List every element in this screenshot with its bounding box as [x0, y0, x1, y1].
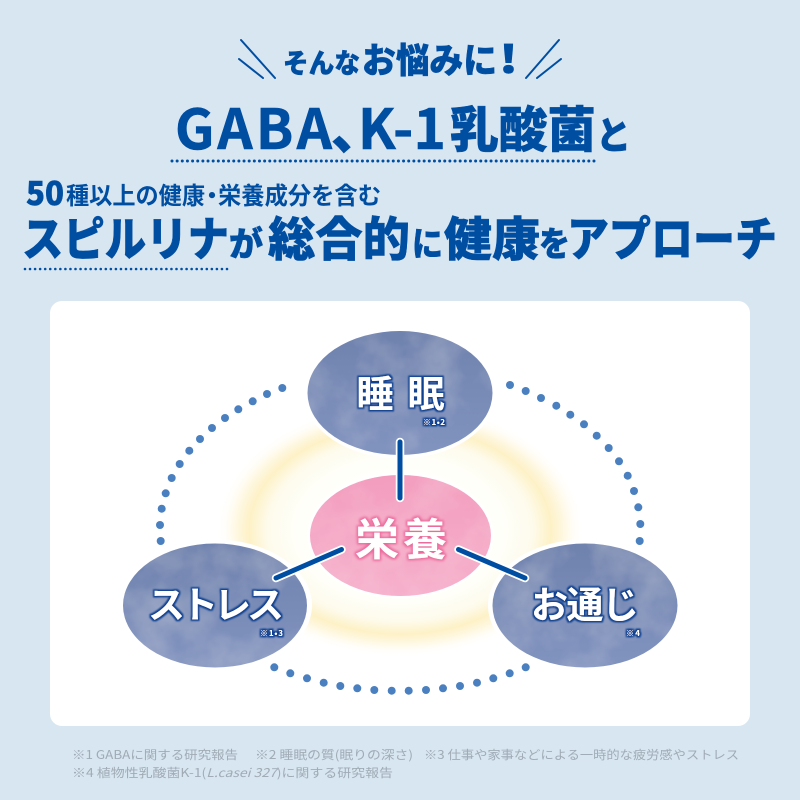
- footnotes: [72, 746, 739, 781]
- bubble: ストレス (left): [118, 540, 312, 672]
- heading: そんなお悩みに!: [283, 29, 518, 84]
- footnotes: ※3 仕事や家事などによる一時的な疲労感やストレス: [424, 746, 739, 763]
- heading: GABA、K-1乳酸菌と: [175, 85, 631, 165]
- heading: スピルリナが総合的に健康をアプローチ: 総合的: [268, 201, 410, 270]
- footnotes: ※2 睡眠の質(眠りの深さ): [255, 746, 413, 763]
- connector: top to center: [396, 442, 404, 498]
- subheading: 50種以上の健康・栄養成分を含む: [26, 169, 381, 215]
- subheading: 50種以上の健康・栄養成分を含む: 種以上の健康: [66, 176, 205, 211]
- heading: スピルリナが総合的に健康をアプローチ: [22, 201, 777, 270]
- heading: スピルリナが総合的に健康をアプローチ: を: [539, 217, 570, 266]
- heading: そんなお悩みに!: !: [499, 29, 518, 84]
- heading: スピルリナが総合的に健康をアプローチ: 健康: [444, 201, 540, 270]
- dotted ring: right arc: [506, 381, 644, 545]
- bubble: お通じ (right): お通じ: [531, 575, 639, 629]
- footnotes: ※1 GABAに関する研究報告: [72, 746, 238, 763]
- heading: GABA、K-1乳酸菌と: GABA: [175, 85, 333, 165]
- icon: right emphasis lines: [526, 40, 561, 78]
- heading: GABA、K-1乳酸菌と: 、: [331, 89, 383, 164]
- bubble: 睡眠 (top): 睡眠: [356, 364, 444, 418]
- connector: left to center: [276, 550, 342, 578]
- connector: right to center: [458, 550, 525, 578]
- bubble: 栄養 (center): [308, 472, 494, 598]
- subheading: 50種以上の健康・栄養成分を含む: 栄養成分を含む: [218, 176, 381, 211]
- subheading: 50種以上の健康・栄養成分を含む: 50: [26, 169, 64, 215]
- heading: スピルリナが総合的に健康をアプローチ: アプローチ: [567, 201, 777, 270]
- bubble: お通じ (right): ※4: [626, 628, 640, 639]
- yellow glow: [216, 403, 584, 657]
- dotted ring: left arc: [156, 384, 286, 545]
- heading: スピルリナが総合的に健康をアプローチ: スピルリナ: [22, 201, 229, 270]
- heading: スピルリナが総合的に健康をアプローチ: が: [229, 217, 263, 266]
- bubble: 睡眠 (top): [304, 328, 496, 458]
- bubble: お通じ (right): [488, 540, 682, 672]
- heading: GABA、K-1乳酸菌と: 乳酸菌: [450, 91, 596, 162]
- heading: GABA、K-1乳酸菌と: と: [596, 105, 631, 160]
- heading: スピルリナが総合的に健康をアプローチ: に: [412, 217, 443, 266]
- dotted ring: bottom arc: [270, 663, 530, 695]
- subheading: 50種以上の健康・栄養成分を含む: ・: [200, 176, 224, 211]
- heading: そんなお悩みに!: お悩みに: [362, 33, 497, 84]
- heading: そんなお悩みに!: そんな: [283, 42, 360, 81]
- dotted underline: GABA: [172, 160, 594, 162]
- bubble: ストレス (left): ※1•3: [260, 628, 283, 639]
- icon: left emphasis lines: [239, 40, 275, 78]
- heading: GABA、K-1乳酸菌と: K-1: [358, 85, 446, 165]
- dotted underline: スピルリナ: [25, 268, 228, 270]
- bubble: 栄養 (center): 栄養: [355, 504, 447, 568]
- footnotes: ※4 植物性乳酸菌K-1( L.casei 327 )に関する研究報告: [72, 764, 393, 781]
- bubble: 睡眠 (top): ※1•2: [423, 417, 445, 428]
- panel: diagram card: [50, 301, 750, 726]
- bubble: ストレス (left): ストレス: [148, 575, 284, 629]
